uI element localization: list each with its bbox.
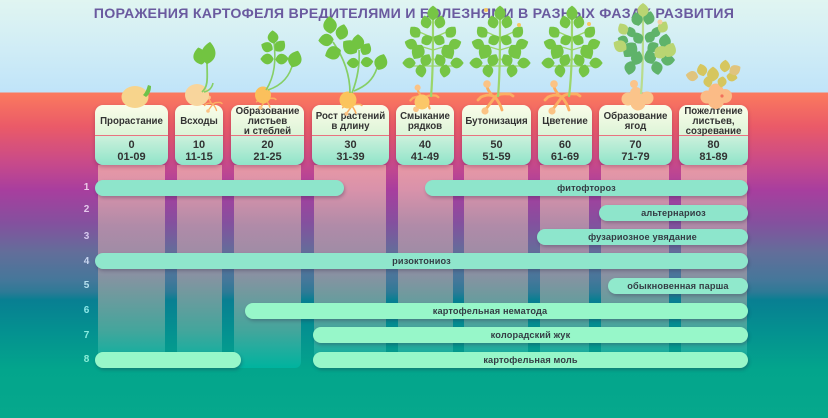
stage card: Смыкание рядков: 41-49 (411, 151, 439, 163)
stage card: Прорастание: 01-09 (117, 151, 146, 163)
row numbers: 1 (84, 182, 89, 193)
stage card: Бутонизация: 51-59 (482, 151, 511, 163)
plant illustrations (122, 3, 740, 116)
bar 5: обыкновенная парша (608, 278, 748, 294)
row numbers: 4 (84, 256, 89, 267)
bar 6: картофельная нематода: картофельная нематода (433, 306, 547, 316)
bar 6: картофельная нематода (245, 303, 748, 319)
stage card: Прорастание: Прорастание (100, 116, 163, 127)
row numbers: 3 (84, 231, 89, 242)
stage card: Всходы: Всходы (180, 116, 218, 127)
bar 4: ризоктониоз (95, 253, 748, 269)
stage card: Прорастание: 0 (128, 139, 135, 151)
stage card: Пожелтение листьев, созревание: 81-89 (699, 151, 728, 163)
plant 8: berry formation (611, 3, 679, 110)
stage card: Цветение: 61-69 (551, 151, 579, 163)
row numbers: 5 (84, 280, 89, 291)
stage card: Смыкание рядков: Смыкание (400, 111, 450, 122)
stage card: Рост растений в длину: 30 (344, 139, 357, 151)
stage card: Бутонизация: Бутонизация (465, 116, 528, 127)
row numbers: 8 (84, 354, 89, 365)
plant 6: budding (469, 6, 531, 115)
stage card: Рост растений в длину: Рост растений (316, 111, 385, 122)
stage card: Смыкание рядков: 40 (419, 139, 431, 151)
row numbers: 2 (84, 204, 89, 215)
bar 4: ризоктониоз: ризоктониоз (392, 256, 451, 266)
stage card: Бутонизация: 50 (490, 139, 503, 151)
stage card: Рост растений в длину (312, 105, 389, 165)
stage card: Образование листьев и стеблей: Образование (236, 106, 299, 117)
bar 8a: картофельная моль early (95, 352, 241, 368)
stage card: Образование листьев и стеблей (231, 105, 304, 165)
stage card: Пожелтение листьев, созревание: 80 (707, 139, 720, 151)
bar 8b: картофельная моль (313, 352, 748, 368)
plant 4: stem elongation (318, 16, 390, 116)
bar 7: колорадский жук (313, 327, 748, 343)
bar 3: фузариозное увядание (537, 229, 748, 245)
stage card: Образование ягод: ягод (625, 121, 646, 132)
stage card: Бутонизация (462, 105, 531, 165)
stage card: Пожелтение листьев, созревание (679, 105, 748, 165)
row numbers (84, 182, 90, 365)
stage card: Рост растений в длину: 31-39 (336, 151, 365, 163)
stage card: Пожелтение листьев, созревание: Пожелтение (684, 106, 743, 117)
stage card: Образование ягод: 70 (629, 139, 642, 151)
stage card: Всходы: 11-15 (185, 151, 213, 163)
stage card: Образование ягод (599, 105, 672, 165)
stage card: Всходы (175, 105, 223, 165)
bar 2: альтернариоз (599, 205, 748, 221)
growth stage header cards (93, 105, 750, 169)
stage card: Цветение: Цветение (542, 116, 588, 127)
plant 5: canopy closure (402, 6, 464, 112)
stage card: Всходы: 10 (193, 139, 205, 151)
plant 2: emergence (185, 41, 222, 113)
stage card: Образование листьев и стеблей: 20 (261, 139, 274, 151)
stage card: Цветение (538, 105, 592, 165)
bar 1b: фитофтороз: фитофтороз (557, 183, 616, 193)
bar 1a: фитофтороз early (95, 180, 344, 196)
bar 2: альтернариоз: альтернариоз (641, 208, 706, 218)
row numbers: 7 (84, 330, 89, 341)
bar 3: фузариозное увядание: фузариозное увядание (588, 232, 697, 242)
stage card: Цветение: 60 (559, 139, 571, 151)
stage card: Образование листьев и стеблей: 21-25 (253, 151, 282, 163)
stage card: Смыкание рядков: рядков (408, 121, 442, 132)
stage card: Образование ягод: Образование (604, 111, 667, 122)
plant 3: leaf and stem formation (255, 30, 304, 110)
plant 7: flowering (541, 6, 603, 115)
bar 5: обыкновенная парша: обыкновенная парша (627, 281, 729, 291)
stage card: Рост растений в длину: в длину (331, 121, 370, 132)
stage card: Пожелтение листьев, созревание: листьев, (692, 116, 735, 127)
plant 9: yellowing and ripening (685, 59, 743, 109)
row numbers: 6 (84, 305, 89, 316)
stage card: Образование листьев и стеблей: и стеблей (244, 126, 291, 137)
stage card: Образование ягод: 71-79 (621, 151, 650, 163)
plant 1: sprouting tuber (122, 85, 151, 108)
stage card: Образование листьев и стеблей: листьев (248, 116, 287, 127)
stage card: Пожелтение листьев, созревание: созревание (686, 126, 741, 137)
stage card: Прорастание (95, 105, 168, 165)
stage card: Смыкание рядков (396, 105, 454, 165)
bar 1b: фитофтороз (425, 180, 748, 196)
bar 7: колорадский жук: колорадский жук (491, 330, 570, 340)
title: ПОРАЖЕНИЯ КАРТОФЕЛЯ ВРЕДИТЕЛЯМИ И БОЛЕЗНЯМИ В РАЗНЫХ ФАЗАХ РАЗВИТИЯ (94, 6, 734, 22)
bar 8b: картофельная моль: картофельная моль (483, 355, 578, 365)
